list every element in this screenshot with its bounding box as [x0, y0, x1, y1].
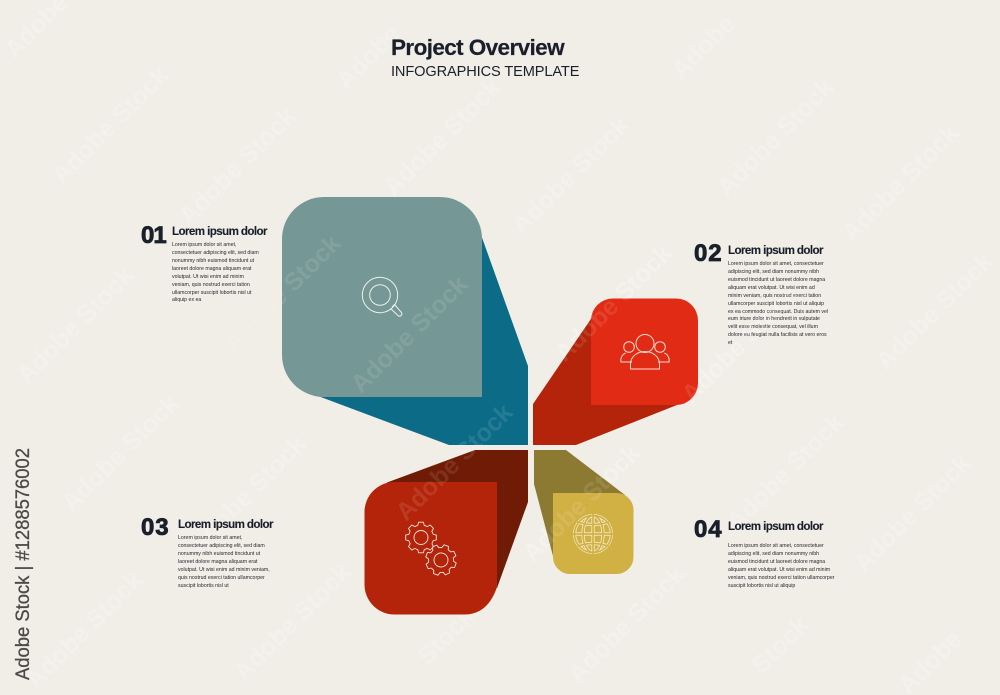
- watermark pattern on background: Adobe Stock: [711, 73, 839, 201]
- body 04: veniam, quis nostrud exerci tation ullamcorper: [728, 575, 834, 581]
- body 03: suscipit lobortis nisl ut: [178, 583, 229, 589]
- watermark pattern on background: Adobe Stock: [173, 102, 301, 230]
- watermark pattern on background: Adobe Stock: [562, 560, 690, 688]
- petal 1: teal: [282, 197, 528, 445]
- body 04: [728, 543, 834, 589]
- watermark pattern on background: Adobe Stock: [506, 111, 634, 239]
- watermark pattern on background: Adobe Stock: [11, 261, 139, 389]
- body 02: dolore eu feugiat nulla facilisis at vero eros: [728, 332, 827, 338]
- watermark pattern on background: Stock: [746, 611, 814, 679]
- body 04: Lorem ipsum dolor sit amet, consectetuer: [728, 543, 824, 549]
- number 02: 02: [694, 240, 722, 267]
- body 03: consectetuer adipiscing elit, sed diam: [178, 543, 265, 549]
- body 02: et: [728, 340, 732, 346]
- body 03: quis nostrud exerci tation ullamcorper: [178, 575, 265, 581]
- title: Project Overview: [391, 35, 564, 60]
- watermark pattern on background: Adobe Stock: [20, 566, 148, 694]
- stock id label: Adobe Stock | #1288576002: [13, 448, 34, 680]
- watermark pattern on background: Adobe Stock: [836, 119, 964, 247]
- watermark pattern on background: Adobe Stock: [870, 247, 998, 375]
- body 02: Lorem ipsum dolor sit amet, consectetuer: [728, 261, 824, 267]
- watermark pattern on background: Adobe Stock: [56, 389, 184, 517]
- watermark pattern over panels: Adobe Stock: [345, 270, 473, 398]
- watermark pattern on background: Adobe: [331, 20, 406, 95]
- watermark pattern on background: Adobe: [666, 10, 741, 85]
- watermark pattern over panels: Adobe Stock: [549, 239, 677, 367]
- body 02: ullamcorper suscipit lobortis nisl ut aliquip: [728, 301, 824, 307]
- body 03: Lorem ipsum dolor sit amet,: [178, 535, 242, 541]
- body 01: consectetuer adipiscing elit, sed diam: [172, 250, 259, 256]
- watermark pattern on background: Stock: [412, 602, 480, 670]
- body 04: suscipit lobortis nisl ut aliquip: [728, 583, 795, 589]
- icon: gears: [406, 522, 461, 580]
- number 01: 01: [141, 222, 166, 249]
- body 03: volutpat. Ut wisi enim ad minim veniam,: [178, 567, 270, 573]
- body 02: minim veniam, quis nostrud exerci tation: [728, 293, 821, 299]
- icon: magnifier: [362, 277, 402, 316]
- body 04: adipiscing elit, sed diam nonummy nibh: [728, 551, 819, 557]
- petal 4: gold: [534, 450, 634, 574]
- watermark pattern on background: Adobe Stock: [378, 73, 506, 201]
- watermark pattern over panels: Adobe Stock: [517, 439, 645, 567]
- heading 04: Lorem ipsum dolor: [728, 520, 823, 533]
- watermark pattern on background: Adobe Stock: [676, 280, 804, 408]
- number 04: 04: [694, 516, 722, 543]
- body 01: volutpat. Ut wisi enim ad minim: [172, 274, 244, 280]
- body 02: euismod tincidunt ut laoreet dolore magna: [728, 277, 825, 283]
- watermark pattern on background: Adobe Stock: [183, 430, 311, 558]
- icon: globe: [573, 514, 613, 554]
- watermark pattern over panels: Adobe Stock: [676, 280, 804, 408]
- text block 02: [694, 240, 828, 346]
- watermark pattern on background: Adobe Stock: [721, 408, 849, 536]
- body 01: aliquip ex ea: [172, 297, 201, 303]
- watermark pattern on background: Adobe Stock: [46, 61, 174, 189]
- watermark pattern over panels: Adobe Stock: [390, 398, 518, 526]
- watermark pattern on background: Adobe Stock: [517, 439, 645, 567]
- watermark pattern on background: Adobe Stock: [848, 449, 976, 577]
- body 01: [172, 242, 259, 303]
- body 02: eum iriure dolor in hendrerit in vulputate: [728, 316, 820, 322]
- body 02: velit esse molestie consequat, vel illum: [728, 324, 818, 330]
- watermark pattern over panels: Adobe Stock: [218, 229, 346, 357]
- body 03: [178, 535, 270, 589]
- body 02: ex ea commodo consequat. Duis autem vel: [728, 309, 828, 315]
- petal diagram: [282, 197, 698, 614]
- heading 03: Lorem ipsum dolor: [178, 518, 273, 531]
- body 01: veniam, quis nostrud exerci tation: [172, 282, 250, 288]
- petal 3: dark red: [364, 450, 528, 614]
- heading 01: Lorem ipsum dolor: [172, 225, 267, 238]
- body 04: aliquam erat volutpat. Ut wisi enim ad minim: [728, 567, 830, 573]
- body 02: adipiscing elit, sed diam nonummy nibh: [728, 269, 819, 275]
- text block 03: [141, 514, 274, 589]
- body 01: ullamcorper suscipit lobortis nisl ut: [172, 290, 251, 296]
- watermark pattern on background: Adobe Stock: [228, 558, 356, 686]
- text block 04: [694, 516, 834, 589]
- body 02: [728, 261, 828, 346]
- watermark pattern on background: Adobe Stock: [549, 239, 677, 367]
- body 02: aliquam erat volutpat. Ut wisi enim ad: [728, 285, 815, 291]
- title: [391, 35, 579, 80]
- number 03: 03: [141, 514, 170, 541]
- heading 02: Lorem ipsum dolor: [728, 244, 823, 257]
- body 04: euismod tincidunt ut laoreet dolore magna: [728, 559, 825, 565]
- text block 01: [141, 222, 268, 303]
- petal 2: red: [533, 298, 698, 445]
- body 03: nonummy nibh euismod tincidunt ut: [178, 551, 260, 557]
- body 01: laoreet dolore magna aliquam erat: [172, 266, 252, 272]
- body 03: laoreet dolore magna aliquam erat: [178, 559, 258, 565]
- title: INFOGRAPHICS TEMPLATE: [391, 64, 579, 80]
- icon: people: [621, 334, 669, 369]
- body 01: nonummy nibh euismod tincidunt ut: [172, 258, 254, 264]
- body 01: Lorem ipsum dolor sit amet,: [172, 242, 236, 248]
